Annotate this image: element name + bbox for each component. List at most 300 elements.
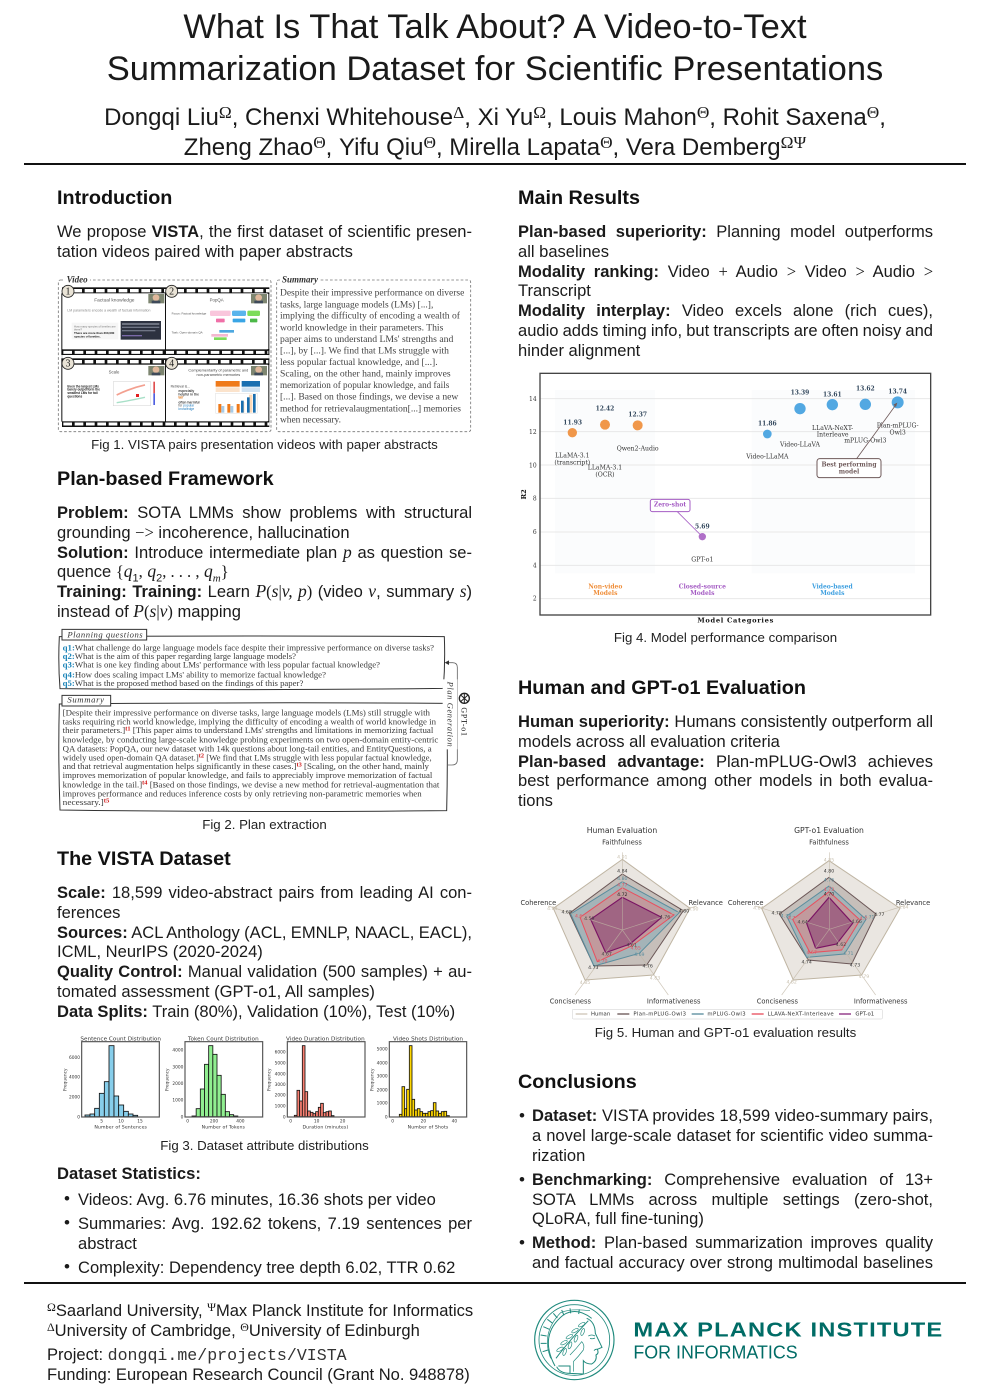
slide 2: PopQA bbox=[210, 298, 224, 303]
value labels: 11.86 bbox=[758, 420, 777, 427]
radar: human evaluation: 4.85 bbox=[580, 980, 590, 986]
legend bbox=[572, 1009, 882, 1019]
histogram: token count bbox=[165, 1037, 263, 1130]
histogram: video shots: 0 bbox=[391, 1119, 394, 1125]
histogram: sentence count: Sentence Count Distribution bbox=[80, 1037, 161, 1043]
slide 1: How many species of beetles are bbox=[74, 324, 116, 328]
list: conclusions: Dataset: VISTA provides 18,599 video-summary pairs, bbox=[532, 1106, 933, 1125]
histogram: sentence count bbox=[62, 1037, 161, 1130]
histogram: sentence count: Number of Sentences bbox=[94, 1124, 148, 1130]
figure 4: model performance scatter chart: R2 bbox=[520, 489, 528, 499]
summary lines: t2 bbox=[199, 754, 204, 760]
summary lines: [Despite their impressive performance on diverse tasks, large language models (LMs) still struggle with bbox=[63, 709, 431, 718]
histogram: video duration: 2000 bbox=[275, 1093, 286, 1099]
radar: GPT-o1 evaluation: 4.67 bbox=[806, 950, 817, 956]
radar: human evaluation: 4.77 bbox=[617, 882, 628, 888]
summary lines: widely used open-domain QA dataset.] bbox=[63, 753, 192, 762]
text block: main results bbox=[518, 222, 933, 360]
radar: human evaluation: 4.84 bbox=[547, 906, 558, 912]
data points bbox=[568, 420, 643, 437]
y axis: 10 bbox=[529, 462, 537, 469]
histogram: video shots: 20 bbox=[421, 1119, 426, 1125]
model labels: Video-LLaMA bbox=[745, 454, 789, 461]
summary lines: improves performance and reduces inference costs by only retrieving non-parametric memories when bbox=[63, 789, 423, 798]
model labels: mPLUG-Owl3 bbox=[844, 437, 887, 444]
figure 2: plan extraction: Summary bbox=[67, 695, 104, 705]
radar: GPT-o1 evaluation: 4.76 bbox=[824, 878, 834, 884]
frame numbers bbox=[62, 285, 178, 370]
histogram: sentence count: 6000 bbox=[69, 1055, 80, 1061]
summary text: paper aims to understand LMs' strengths and bbox=[280, 334, 454, 344]
text block: plan-based framework: quence {q1, q2, . . . , qm} bbox=[57, 561, 229, 585]
radar: GPT-o1 evaluation: 4.82 bbox=[786, 979, 797, 985]
text block: VISTA dataset: Data Splits: Train (80%), Validation (10%), Test (10%) bbox=[57, 1002, 455, 1021]
list: conclusions: • bbox=[519, 1233, 525, 1252]
text block: evaluation bbox=[518, 712, 933, 810]
slide 1: species of beetles. bbox=[74, 334, 101, 338]
callout: zero-shot: Zero-shot bbox=[654, 502, 686, 509]
list: conclusions: a novel large-scale dataset for scientific video summa- bbox=[532, 1126, 933, 1145]
slide 3 bbox=[67, 369, 155, 406]
list: dataset statistics: • bbox=[64, 1213, 70, 1232]
callout: zero-shot bbox=[650, 499, 701, 535]
legend: Plan-mPLUG-Owl3 bbox=[633, 1012, 686, 1018]
radar: GPT-o1 evaluation: 4.7 bbox=[788, 915, 795, 921]
summary lines: [Based on those findings, we devise a new method for retrieval-augmentation that bbox=[148, 780, 440, 789]
histogram: video duration: 5000 bbox=[275, 1060, 286, 1066]
planning question lines bbox=[63, 643, 434, 688]
histogram: sentence count: Frequency bbox=[62, 1068, 68, 1091]
figure 2: plan extraction: Planning questions bbox=[66, 629, 143, 639]
summary text: [...], by [...]. We find that LMs struggle with bbox=[280, 345, 450, 355]
summary text: implying the difficulty of encoding a wealth of bbox=[280, 311, 460, 321]
model labels: Plan-mPLUG- bbox=[877, 423, 919, 430]
planning question lines: q4:How does scaling impact LMs' ability to memorize factual knowledge? bbox=[63, 670, 326, 679]
histogram: token count: Number of Tokens bbox=[202, 1124, 246, 1130]
radar: GPT-o1 evaluation: 4.85 bbox=[824, 858, 834, 864]
histogram: token count: Frequency bbox=[165, 1068, 171, 1091]
slide 4: non-parametric memories bbox=[197, 373, 240, 377]
slide 1: there? bbox=[74, 327, 82, 331]
histogram: video duration: 4000 bbox=[275, 1071, 286, 1077]
arrow: plan generation: Plan Generation bbox=[445, 681, 454, 747]
value labels: 12.42 bbox=[596, 405, 614, 412]
list: conclusions: SOTA LMMs across multiple settings (zero-shot, bbox=[532, 1190, 933, 1209]
list: conclusions: Benchmarking: Comprehensive evaluation of 13+ bbox=[532, 1170, 933, 1189]
histogram: video duration: 6000 bbox=[275, 1050, 286, 1056]
category labels: Models bbox=[820, 590, 845, 597]
slide 1: LM parameters encode a wealth of factual information bbox=[67, 308, 150, 312]
histogram: sentence count: 10 bbox=[118, 1119, 124, 1125]
slide 4: often harmful bbox=[178, 400, 200, 404]
radar: human evaluation: Coherence bbox=[520, 899, 556, 907]
caption: figure 1: Fig 1. VISTA pairs presentation videos with paper abstracts bbox=[91, 437, 438, 452]
y axis: 6 bbox=[533, 529, 537, 536]
radar: GPT-o1 evaluation: Informativeness bbox=[854, 997, 908, 1005]
radar: human evaluation: 4.80 bbox=[679, 909, 689, 915]
institute name bbox=[633, 1319, 943, 1362]
summary lines: improves memorization of popular knowledge, and fails to appreciably improve memorization of factual bbox=[63, 771, 433, 780]
histogram: token count: 400 bbox=[236, 1119, 245, 1125]
icon: GPT-o1 bbox=[459, 693, 469, 736]
histogram: video shots: Frequency bbox=[369, 1068, 375, 1091]
histogram: token count: 1000 bbox=[172, 1098, 184, 1104]
histogram: video shots: 4000 bbox=[377, 1060, 388, 1066]
model labels: (transcript) bbox=[554, 460, 590, 467]
frame numbers: 1 bbox=[65, 287, 70, 298]
slide 4: Retrieval is... bbox=[171, 384, 190, 388]
y axis: 12 bbox=[529, 429, 537, 436]
histogram: video shots: 5000 bbox=[377, 1047, 388, 1053]
caption: figure 3: Fig 3. Dataset attribute distributions bbox=[160, 1138, 369, 1153]
summary lines: [This paper aims to understand LMs' strengths and limitations in memorizing factual bbox=[131, 726, 434, 735]
radar: GPT-o1 evaluation: 4.71 bbox=[843, 951, 854, 957]
model labels: LLaMA-3.1 bbox=[588, 465, 622, 472]
planning question lines: q1:What challenge do large language models face despite their impressive performance on diverse tasks? bbox=[63, 643, 434, 652]
histogram: token count: 4000 bbox=[172, 1048, 184, 1054]
slide 3: Scale bbox=[109, 369, 120, 374]
histogram: video shots: 3000 bbox=[377, 1074, 388, 1080]
footer: affiliations and funding: ΩSaarland University, ΨMax Planck Institute for Informatics bbox=[47, 1300, 473, 1320]
y axis: 8 bbox=[533, 496, 537, 503]
text block: main results: all baselines bbox=[518, 242, 609, 261]
list: dataset statistics: • bbox=[64, 1189, 70, 1208]
radar: GPT-o1 evaluation: 4.77 bbox=[874, 912, 885, 918]
list: dataset statistics: abstract bbox=[78, 1234, 137, 1253]
list: conclusions: • bbox=[519, 1170, 525, 1189]
histogram: sentence count: 2000 bbox=[69, 1094, 80, 1100]
grid lines bbox=[541, 399, 930, 599]
summary text: Despite their impressive performance on diverse bbox=[280, 288, 464, 298]
text block: VISTA dataset: Sources: ACL Anthology (ACL, EMNLP, NAACL, EACL), bbox=[57, 923, 472, 942]
category shading bbox=[555, 390, 915, 573]
summary lines: t1 bbox=[125, 726, 131, 732]
title: Summarization Dataset for Scientific Presentations bbox=[107, 50, 883, 88]
icon: GPT-o1: GPT-o1 bbox=[460, 707, 469, 736]
summary text: world knowledge in their parameters. This bbox=[280, 322, 444, 332]
text block: VISTA dataset: Scale: 18,599 video-abstract pairs from leading AI con- bbox=[57, 883, 472, 902]
value labels bbox=[563, 385, 907, 530]
authors bbox=[104, 103, 886, 161]
text block: main results: Modality ranking: Video + Audio > Video > Audio > bbox=[518, 262, 933, 281]
radar: GPT-o1 evaluation: 4.7 bbox=[860, 916, 867, 922]
heading: Plan-based Framework: Plan-based Framework bbox=[57, 468, 274, 490]
histogram: video duration: 0 bbox=[283, 1114, 286, 1120]
radar: GPT-o1 evaluation: 4.73 bbox=[824, 887, 834, 893]
heading: Main Results: Main Results bbox=[518, 187, 640, 209]
text block: main results: Modality interplay: Video excels alone (rich cues), bbox=[518, 301, 933, 320]
slide 4: for popular bbox=[178, 404, 194, 408]
histogram: video duration: Video Duration Distribution bbox=[286, 1037, 365, 1043]
summary lines: necessary.] bbox=[63, 798, 99, 807]
planning question lines: q5:What is the proposed method based on the findings of this paper? bbox=[63, 679, 304, 688]
radar: GPT-o1 evaluation: 4.78 bbox=[771, 910, 782, 916]
radar: human evaluation: 4.67 bbox=[601, 951, 612, 957]
radar: human evaluation: Human Evaluation bbox=[587, 826, 657, 835]
summary text: [...]. Based on those findings, we devise a new bbox=[280, 392, 459, 402]
value labels: 13.61 bbox=[823, 391, 842, 398]
slide 4: Complementarity of parametric and bbox=[188, 369, 248, 373]
text block: plan-based framework: Solution: Introduce intermediate plan p as question se- bbox=[57, 542, 472, 562]
value labels: 13.39 bbox=[791, 389, 809, 396]
legend: GPT-o1 bbox=[855, 1012, 874, 1018]
slide 4: tail bbox=[178, 396, 183, 400]
list: dataset statistics bbox=[64, 1189, 472, 1277]
list: dataset statistics: Videos: Avg. 6.76 minutes, 16.36 shots per video bbox=[78, 1190, 436, 1209]
model labels: Owl3 bbox=[890, 429, 906, 436]
radar: GPT-o1 evaluation: 4.62 bbox=[836, 942, 846, 948]
summary lines: [Scaling, on the other hand, mainly bbox=[302, 762, 430, 771]
radar: human evaluation: 4.68 bbox=[561, 910, 572, 916]
histogram: video shots: 0 bbox=[385, 1114, 388, 1120]
radar: GPT-o1 evaluation: 4.84 bbox=[898, 904, 909, 910]
summary lines bbox=[63, 709, 440, 807]
category labels: Video-based bbox=[811, 583, 853, 590]
radar: human evaluation: 4.90 bbox=[688, 907, 699, 913]
histogram: token count: 0 bbox=[181, 1114, 184, 1120]
y axis: 2 bbox=[533, 596, 537, 603]
radar: GPT-o1 evaluation: Faithfulness bbox=[809, 838, 849, 846]
legend: LLAVA-NeXT-Interleave bbox=[768, 1012, 834, 1018]
summary text: when necessary. bbox=[280, 415, 341, 425]
text block: plan-based framework: Problem: SOTA LMMs show problems with structural bbox=[57, 503, 472, 522]
value labels: 13.62 bbox=[856, 385, 875, 392]
radar: human evaluation: 4.6 bbox=[575, 914, 582, 920]
text block: introduction: tation videos paired with paper abstracts bbox=[57, 242, 353, 261]
title bbox=[107, 8, 883, 88]
radar: human evaluation: Faithfulness bbox=[602, 838, 642, 846]
model labels: GPT-o1 bbox=[691, 557, 713, 564]
footer: affiliations and funding bbox=[47, 1300, 473, 1384]
radar: GPT-o1 evaluation: Coherence bbox=[728, 899, 764, 907]
planning question lines: q3:What is one key finding about LMs' performance with less popular factual knowledge? bbox=[63, 661, 380, 670]
histogram: token count: 0 bbox=[186, 1119, 189, 1125]
slide 3: questions bbox=[67, 394, 82, 398]
summary text: less popular factual knowledge, and [...]. bbox=[280, 357, 438, 367]
text block: VISTA dataset: ICML, NeurIPS (2020-2024) bbox=[57, 942, 263, 961]
film strip bbox=[61, 287, 269, 427]
summary text: tasks, large language models (LMs) [...], bbox=[280, 299, 433, 309]
list: conclusions: Method: Plan-based summarization improves quality bbox=[532, 1233, 933, 1252]
radar: human evaluation: Informativeness bbox=[647, 997, 701, 1005]
histogram: video duration: Frequency bbox=[267, 1068, 273, 1091]
radar: GPT-o1 evaluation: 4.70 bbox=[824, 891, 834, 897]
summary text: method for retrievalaugmentation[...] memories bbox=[280, 403, 462, 413]
value labels: 12.37 bbox=[628, 412, 647, 419]
radar: human evaluation: Conciseness bbox=[550, 997, 591, 1005]
text block: introduction: We propose VISTA, the first dataset of scientific presen- bbox=[57, 222, 472, 241]
text block: plan-based framework: Training: Training: Learn P(s|v, p) (video v, summary s) bbox=[57, 581, 472, 601]
footer: affiliations and funding: Project: dongqi.me/projects/VISTA bbox=[47, 1345, 347, 1365]
model labels: LLaMA-3.1 bbox=[555, 453, 590, 460]
text block: main results: Transcript bbox=[518, 281, 591, 300]
slide 1 bbox=[67, 298, 161, 340]
radar: human evaluation: 4.91 bbox=[617, 854, 628, 860]
text block: plan-based framework bbox=[57, 503, 472, 621]
slide 4 bbox=[171, 369, 260, 413]
footer: affiliations and funding: Funding: European Research Council (Grant No. 948878) bbox=[47, 1365, 470, 1384]
list: dataset statistics: Summaries: Avg. 192.62 tokens, 7.19 sentences per bbox=[78, 1214, 472, 1233]
histogram: video duration: 1000 bbox=[275, 1104, 286, 1110]
summary text: Scaling, on the other hand, mainly improves bbox=[280, 368, 451, 378]
list: conclusions bbox=[519, 1106, 933, 1272]
slide 2 bbox=[172, 298, 260, 340]
authors: Dongqi LiuΩ, Chenxi WhitehouseΔ, Xi YuΩ, Louis MahonΘ, Rohit SaxenaΘ, bbox=[104, 103, 886, 131]
figure 1: video and summary: Summary bbox=[282, 275, 319, 285]
radar: GPT-o1 evaluation: 4.66 bbox=[851, 919, 862, 925]
summary lines: t5 bbox=[104, 798, 109, 804]
histogram: video shots: 2000 bbox=[377, 1087, 388, 1093]
slide 4: knowledge bbox=[178, 407, 194, 411]
text block: introduction bbox=[57, 222, 472, 261]
histogram: sentence count: 4000 bbox=[69, 1075, 80, 1081]
model labels: (OCR) bbox=[595, 472, 615, 479]
model labels: Interleave bbox=[817, 432, 849, 439]
category labels: Non-video bbox=[588, 583, 622, 590]
radar: human evaluation: 4.72 bbox=[617, 892, 628, 898]
histogram: sentence count: 5 bbox=[100, 1119, 103, 1125]
radar: human evaluation: 4.69 bbox=[634, 952, 645, 958]
text block: main results: Plan-based superiority: Planning model outperforms bbox=[518, 222, 933, 241]
histogram: video shots bbox=[369, 1037, 467, 1130]
summary lines: their parameters.] bbox=[63, 726, 121, 735]
model labels: Qwen2-Audio bbox=[617, 445, 659, 452]
value labels: 5.69 bbox=[695, 523, 710, 530]
summary lines: t3 bbox=[297, 762, 302, 768]
histogram: video shots: 1000 bbox=[377, 1101, 388, 1107]
authors: Zheng ZhaoΘ, Yifu QiuΘ, Mirella LapataΘ, Vera DembergΩΨ bbox=[184, 133, 806, 161]
slide 3: barely outperform the bbox=[67, 388, 100, 392]
radar: GPT-o1 evaluation: 4.71 bbox=[864, 915, 875, 921]
slide 2: Task: Open-domain QA bbox=[172, 331, 203, 335]
caption: figure 4: Fig 4. Model performance comparison bbox=[614, 630, 837, 645]
category labels: Models bbox=[593, 590, 618, 597]
radar: human evaluation: 4.59 bbox=[584, 916, 595, 922]
presenter thumbnails bbox=[148, 294, 267, 375]
caption: figure 2: Fig 2. Plan extraction bbox=[202, 817, 327, 832]
list: conclusions: • bbox=[519, 1106, 525, 1125]
text block: plan-based framework: grounding −> incoherence, hallucination bbox=[57, 523, 350, 542]
callout: best performing model bbox=[817, 403, 897, 478]
radar: GPT-o1 evaluation: 4.74 bbox=[801, 959, 812, 965]
radar: human evaluation: 4.83 bbox=[650, 975, 660, 981]
histogram: video duration: 3000 bbox=[275, 1082, 286, 1088]
list: dataset statistics: • bbox=[64, 1257, 70, 1276]
text block: evaluation: Human superiority: Humans consistently outperform all bbox=[518, 712, 933, 731]
text block: VISTA dataset: Quality Control: Manual validation (500 samples) + au- bbox=[57, 962, 472, 981]
radar: GPT-o1 evaluation: 4.79 bbox=[859, 974, 869, 980]
histogram: token count: 200 bbox=[210, 1119, 218, 1125]
text block: evaluation: best performance among other models in both evalua- bbox=[518, 771, 933, 790]
histogram: video duration: 0 bbox=[289, 1119, 292, 1125]
legend: mPLUG-Owl3 bbox=[707, 1012, 746, 1018]
frame numbers: 2 bbox=[169, 287, 174, 298]
planning question lines: q2:What is the aim of this paper regarding large language models? bbox=[63, 652, 296, 661]
value labels: 13.74 bbox=[888, 389, 907, 396]
histogram: video shots: Video Shots Distribution bbox=[393, 1037, 463, 1043]
text block: main results: audio adds timing info, but transcripts are often noisy and bbox=[518, 321, 933, 340]
heading: Dataset Statistics: Dataset Statistics: bbox=[57, 1164, 201, 1183]
arrow: plan generation bbox=[443, 660, 457, 765]
summary lines: tasks requiring rich world knowledge, implying the difficulty of encoding a wealth of world knowledge in bbox=[63, 717, 437, 726]
radar: GPT-o1 evaluation: 4.80 bbox=[824, 869, 834, 875]
list: dataset statistics: Complexity: Dependency tree depth 6.02, TTR 0.62 bbox=[78, 1258, 455, 1277]
slide 1: Factual knowledge bbox=[94, 298, 135, 304]
frame numbers: 4 bbox=[169, 359, 174, 370]
callout: best performing model: model bbox=[839, 468, 860, 475]
y axis: 14 bbox=[529, 396, 537, 403]
institute name: MAX PLANCK INSTITUTE bbox=[633, 1319, 943, 1342]
y axis: 4 bbox=[533, 562, 537, 569]
histogram: sentence count: 15 bbox=[137, 1119, 143, 1125]
histogram: video duration bbox=[267, 1037, 365, 1130]
institute name: FOR INFORMATICS bbox=[633, 1341, 798, 1362]
histogram: token count: 3000 bbox=[172, 1064, 184, 1070]
radar: human evaluation: 4.80 bbox=[617, 876, 628, 882]
title: What Is That Talk About? A Video-to-Text bbox=[183, 8, 807, 46]
radar: human evaluation: 4.65 bbox=[630, 945, 641, 951]
radar: human evaluation: 4.84 bbox=[617, 868, 628, 874]
text block: plan-based framework: instead of P(s|v) mapping bbox=[57, 601, 241, 621]
histogram: sentence count: 0 bbox=[77, 1114, 80, 1120]
histogram: video shots: 40 bbox=[452, 1119, 457, 1125]
category labels: Closed-source bbox=[679, 583, 726, 590]
text block: evaluation: tions bbox=[518, 791, 553, 810]
radar: human evaluation: 4.73 bbox=[588, 965, 599, 971]
histogram: video duration: Duration (minutes) bbox=[302, 1124, 348, 1130]
histogram: video duration: 10 bbox=[314, 1119, 320, 1125]
planning questions box bbox=[59, 629, 447, 812]
model labels bbox=[554, 423, 919, 564]
heading: Conclusions: Conclusions bbox=[518, 1071, 637, 1093]
radar: human evaluation: Relevance bbox=[688, 899, 723, 907]
icon: Minerva seal bbox=[535, 1300, 614, 1380]
category labels bbox=[588, 583, 853, 597]
text block: VISTA dataset bbox=[57, 883, 472, 1021]
summary text: memorization of popular knowledge, and fails bbox=[280, 380, 450, 390]
radar: human evaluation: 4.76 bbox=[660, 914, 670, 920]
radar: GPT-o1 evaluation: Relevance bbox=[896, 899, 930, 907]
slide 4: especially bbox=[178, 389, 194, 393]
caption: figure 5: Fig 5. Human and GPT-o1 evaluation results bbox=[595, 1025, 856, 1040]
summary text bbox=[280, 288, 464, 425]
list: conclusions: and factual accuracy over strong multimodal baselines bbox=[532, 1253, 933, 1272]
radar: GPT-o1 evaluation: 4.74 bbox=[781, 914, 791, 920]
slide 2: Focus: Factual knowledge bbox=[172, 312, 207, 316]
summary lines: and that retrieval augmentation helps significantly in these cases.] bbox=[63, 762, 282, 771]
heading: Human and GPT-o1 Evaluation: Human and GPT-o1 Evaluation bbox=[518, 677, 806, 699]
model labels: LLaVA-NeXT- bbox=[812, 425, 853, 432]
radar: human evaluation bbox=[520, 826, 723, 1005]
slide 3: Even the largest LMs bbox=[67, 384, 99, 388]
histogram: video duration: 20 bbox=[340, 1119, 346, 1125]
summary lines: knowledge, by conducting large-scale knowledge probing experiments on two open-domain entity-centric bbox=[63, 735, 439, 744]
radar: GPT-o1 evaluation: 4.64 bbox=[797, 919, 808, 925]
radar: GPT-o1 evaluation: GPT-o1 Evaluation bbox=[794, 826, 864, 835]
list: conclusions: rization bbox=[532, 1146, 585, 1165]
heading: The VISTA Dataset: The VISTA Dataset bbox=[57, 848, 231, 870]
list: conclusions: QLoRA, full fine-tuning) bbox=[532, 1209, 704, 1228]
heading: Introduction: Introduction bbox=[57, 187, 172, 209]
callout: best performing model: Best performing bbox=[821, 461, 877, 468]
legend: Human bbox=[591, 1012, 610, 1018]
histogram: token count: Token Count Distribution bbox=[187, 1037, 259, 1043]
radar: human evaluation: 4.61 bbox=[626, 943, 637, 949]
figure 1: video and summary: Video bbox=[67, 275, 88, 285]
figure 4: model performance scatter chart: Model Categories bbox=[697, 616, 774, 624]
category labels: Models bbox=[690, 590, 715, 597]
value labels: 11.93 bbox=[563, 419, 582, 426]
